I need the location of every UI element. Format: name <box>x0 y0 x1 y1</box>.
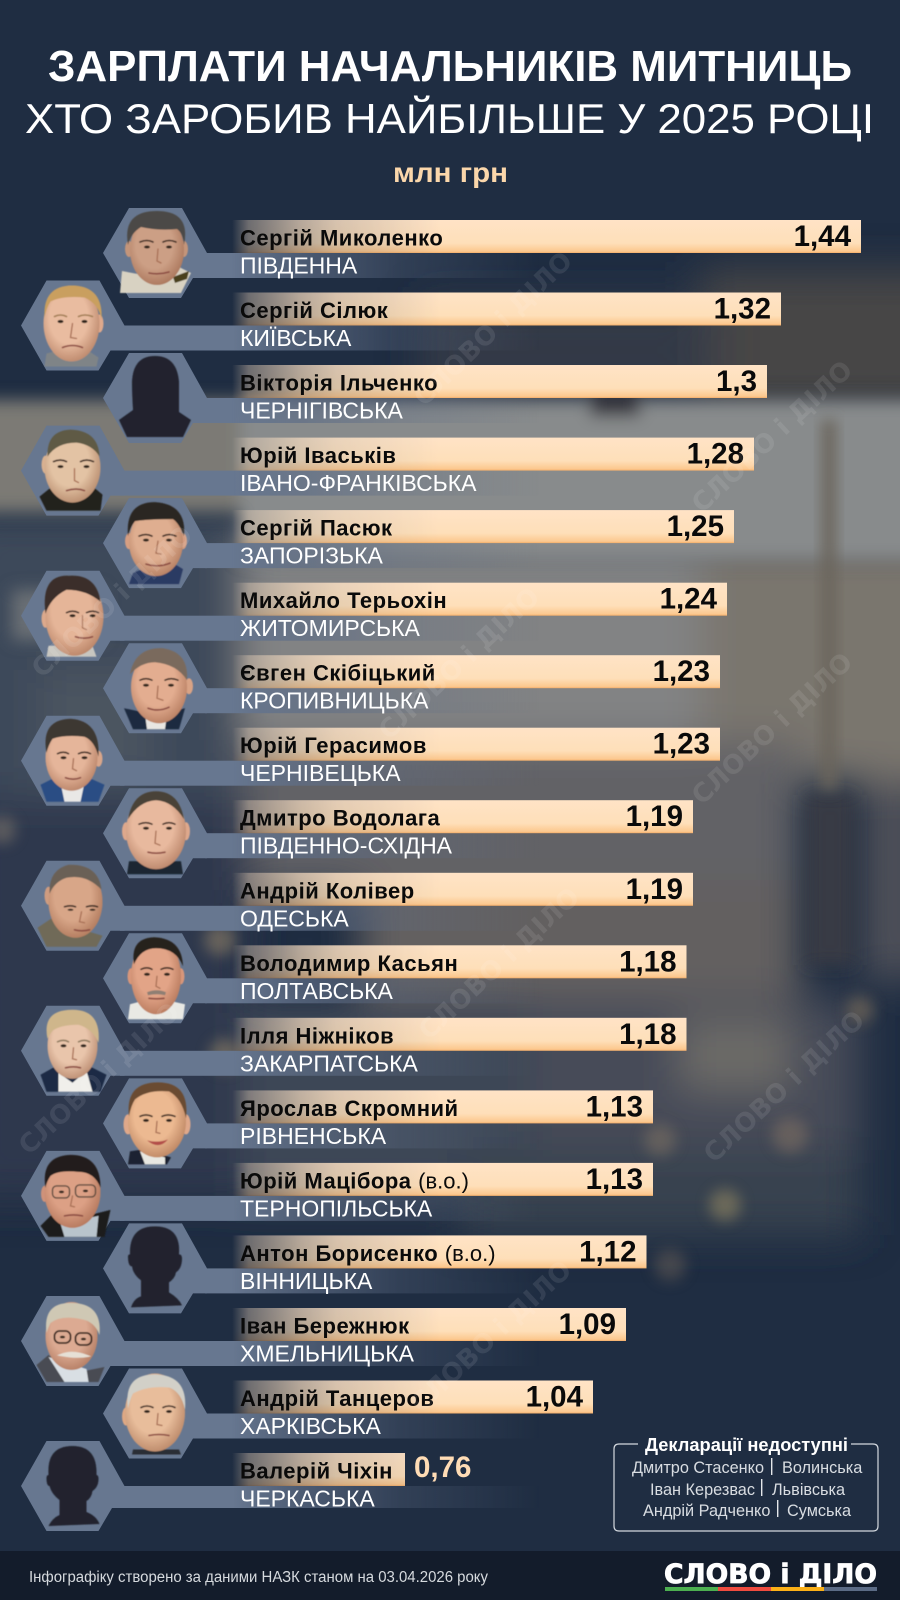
row 10: ОДЕСЬКА <box>240 905 349 931</box>
row 16 <box>21 1296 626 1386</box>
panel: declarations unavailable: Декларації недоступні <box>645 1435 848 1455</box>
row 4: ІВАНО-ФРАНКІВСЬКА <box>240 470 477 496</box>
portrait: Андрій Колівер <box>38 865 102 947</box>
portrait: Юрій Іваськів <box>40 430 102 511</box>
row 7: КРОПИВНИЦЬКА <box>240 688 429 714</box>
watermarks: СЛОВО і ДІЛО <box>686 355 859 519</box>
watermarks: СЛОВО і ДІЛО <box>373 582 546 746</box>
row 8 <box>21 716 720 806</box>
portrait: Іван Бережнюк <box>36 1302 104 1382</box>
watermarks: СЛОВО і ДІЛО <box>413 882 586 1046</box>
row 17: ХАРКІВСЬКА <box>240 1413 381 1439</box>
unit label: млн грн <box>393 157 508 188</box>
watermarks: СЛОВО і ДІЛО <box>408 246 579 412</box>
portrait: silhouette Антон Борисенко <box>128 1226 182 1307</box>
portrait: Сергій Пасюк <box>125 502 187 584</box>
row 7: 1,23 <box>653 655 710 688</box>
row 16: Іван Бережнюк <box>240 1314 410 1338</box>
portrait: silhouette Валерій Чіхін <box>46 1446 100 1526</box>
source note: Інфографіку створено за даними НАЗК станом на 03.04.2026 року <box>29 1569 488 1586</box>
row 14 <box>21 1151 653 1241</box>
row 18: 0,76 <box>414 1451 471 1484</box>
panel: declarations unavailable: Андрій Радченко <box>643 1502 770 1520</box>
portrait: Ілля Ніжніков <box>40 1010 106 1092</box>
row 6 <box>21 571 727 661</box>
title: ХТО ЗАРОБИВ НАЙБІЛЬШЕ У 2025 РОЦІ <box>25 94 874 142</box>
portrait: Ярослав Скромний <box>124 1082 190 1164</box>
row 11: Володимир Касьян <box>240 951 458 976</box>
portrait: Юрій Мацібора <box>40 1155 110 1237</box>
row 4: 1,28 <box>687 438 744 471</box>
row 18: ЧЕРКАСЬКА <box>240 1486 375 1512</box>
row 7 <box>103 643 720 733</box>
panel: declarations unavailable: Волинська <box>782 1459 863 1477</box>
watermarks <box>13 246 871 1419</box>
row 9: ПІВДЕННО-СХІДНА <box>240 833 453 859</box>
panel: declarations unavailable: Сумська <box>787 1502 852 1520</box>
row 14: Юрій Мацібора (в.о.) <box>240 1168 469 1193</box>
row 1 <box>103 208 861 298</box>
panel: declarations unavailable: Дмитро Стасенко <box>632 1459 764 1477</box>
watermarks: СЛОВО і ДІЛО <box>686 647 859 811</box>
row 15: Антон Борисенко (в.о.) <box>240 1241 496 1266</box>
watermarks: СЛОВО і ДІЛО <box>698 1005 871 1169</box>
row 18: Валерій Чіхін <box>240 1458 393 1484</box>
portrait: Володимир Касьян <box>128 937 185 1019</box>
portrait: Дмитро Водолага <box>122 791 190 874</box>
panel: declarations unavailable: Іван Керезвас <box>650 1481 755 1499</box>
row 5: 1,25 <box>667 510 724 543</box>
row 11 <box>103 933 686 1023</box>
portrait: Юрій Герасимов <box>40 719 104 802</box>
row 12 <box>21 1006 686 1096</box>
portrait: Євген Скібіцький <box>124 648 193 729</box>
portrait: Сергій Миколенко <box>120 211 191 293</box>
logo: СЛОВО і ДІЛО <box>664 1559 877 1590</box>
portrait: Михайло Терьохін <box>42 576 104 657</box>
watermarks: СЛОВО і ДІЛО <box>26 520 199 684</box>
row 11: 1,18 <box>619 945 676 978</box>
row 4 <box>21 426 754 516</box>
row 5 <box>103 498 734 588</box>
row 1: ПІВДЕННА <box>240 252 358 278</box>
row 9: 1,19 <box>626 800 683 833</box>
row 3: Вікторія Ільченко <box>240 370 438 396</box>
panel: declarations unavailable <box>614 1435 878 1531</box>
footer bar <box>0 1551 900 1600</box>
row 8: 1,23 <box>653 728 710 761</box>
row 9: Дмитро Водолага <box>240 806 441 831</box>
row 5: ЗАПОРІЗЬКА <box>240 543 384 569</box>
row 4: Юрій Іваськів <box>240 443 396 468</box>
row 17: 1,04 <box>526 1380 584 1414</box>
row 8: ЧЕРНІВЕЦЬКА <box>240 760 401 786</box>
row 17 <box>103 1368 593 1458</box>
portrait: silhouette Вікторія Ільченко <box>119 356 191 437</box>
row 14: 1,13 <box>586 1163 643 1196</box>
row 6: 1,24 <box>660 583 718 616</box>
title <box>25 42 874 142</box>
row 12: Ілля Ніжніков <box>240 1023 394 1048</box>
row 2: Сергій Сілюк <box>240 298 389 323</box>
row 17: Андрій Танцеров <box>240 1386 434 1411</box>
row 10: 1,19 <box>626 873 683 906</box>
row 12: 1,18 <box>619 1018 676 1051</box>
row 2: КИЇВСЬКА <box>240 325 352 351</box>
row 1: Сергій Миколенко <box>240 226 443 250</box>
watermarks: СЛОВО і ДІЛО <box>13 997 186 1161</box>
row 3: 1,3 <box>716 365 757 398</box>
row 8: Юрій Герасимов <box>240 733 427 758</box>
row 2 <box>21 280 781 370</box>
row 11: ПОЛТАВСЬКА <box>240 978 394 1004</box>
row 1: 1,44 <box>794 220 852 253</box>
row 2: 1,32 <box>714 292 771 326</box>
row 15: ВІННИЦЬКА <box>240 1268 373 1294</box>
row 5: Сергій Пасюк <box>240 516 393 541</box>
row 12: ЗАКАРПАТСЬКА <box>240 1050 419 1076</box>
portrait: Андрій Танцеров <box>122 1374 185 1454</box>
row 13: Ярослав Скромний <box>240 1096 459 1121</box>
row 18 <box>21 1441 485 1531</box>
row 15 <box>103 1223 646 1313</box>
portrait: Сергій Сілюк <box>44 285 104 366</box>
row 6: Михайло Терьохін <box>240 588 447 613</box>
row 15: 1,12 <box>579 1235 636 1268</box>
row 16: ХМЕЛЬНИЦЬКА <box>240 1340 415 1366</box>
row 14: ТЕРНОПІЛЬСЬКА <box>240 1195 433 1221</box>
row 13: РІВНЕНСЬКА <box>240 1123 387 1149</box>
row 13: 1,13 <box>586 1090 643 1123</box>
row 7: Євген Скібіцький <box>240 661 436 686</box>
row 3: ЧЕРНІГІВСЬКА <box>240 398 404 424</box>
title: ЗАРПЛАТИ НАЧАЛЬНИКІВ МИТНИЦЬ <box>48 42 852 91</box>
panel: declarations unavailable: Львівська <box>772 1481 846 1499</box>
row 10 <box>21 861 693 951</box>
row 3 <box>103 353 767 443</box>
row 6: ЖИТОМИРСЬКА <box>240 615 421 641</box>
row 13 <box>103 1078 653 1168</box>
watermarks: СЛОВО і ДІЛО <box>405 1255 578 1419</box>
row 9 <box>103 788 693 878</box>
row 16: 1,09 <box>559 1308 616 1341</box>
row 10: Андрій Колівер <box>240 878 415 903</box>
